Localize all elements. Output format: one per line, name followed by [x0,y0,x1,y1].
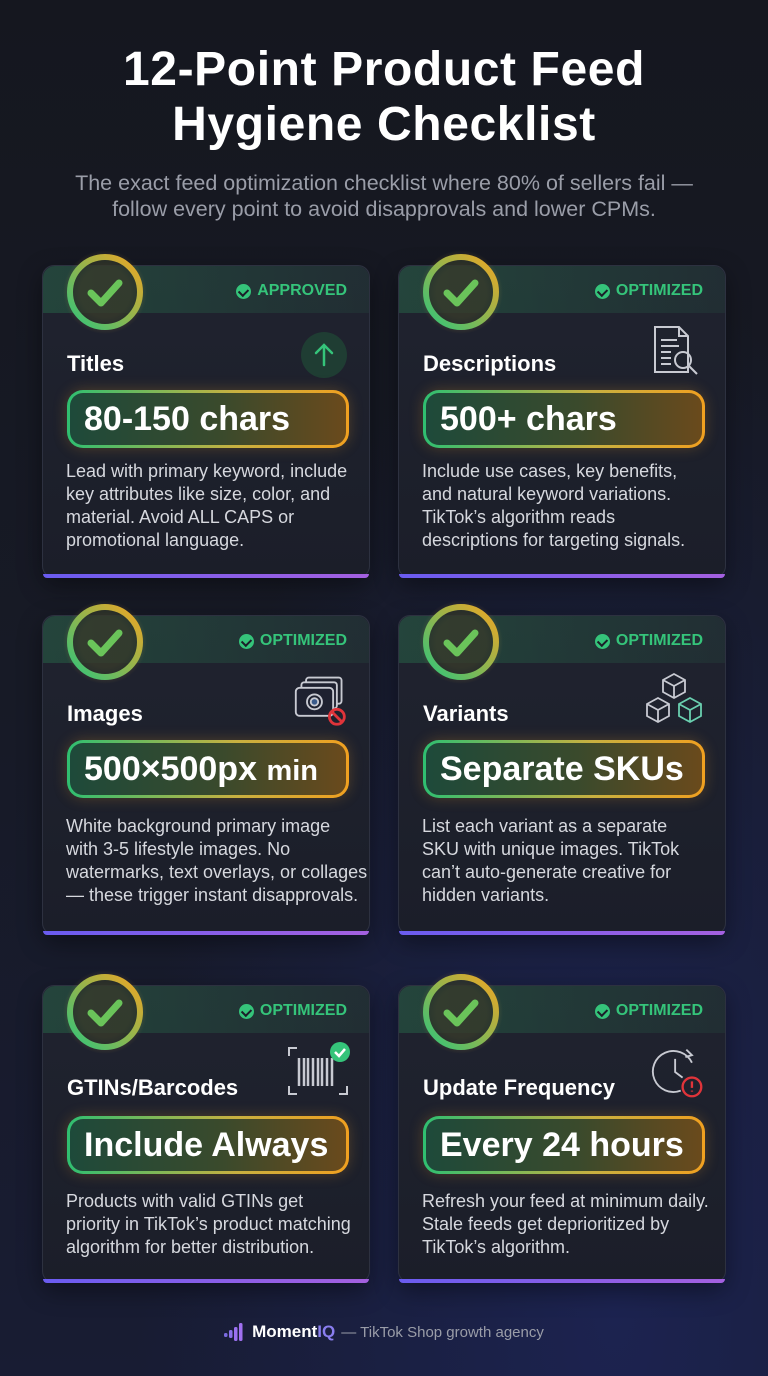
panel: descriptions: 500+ chars [440,400,617,438]
footer [224,1322,544,1341]
status: OPTIMIZED [616,632,703,649]
status: OPTIMIZED [616,282,703,299]
footer: — TikTok Shop growth agency [341,1324,544,1340]
icon: clock alert [652,1049,702,1098]
panel: variants [398,615,726,935]
panel: variants: SKU with unique images. TikTok can’t auto-generate creative for hidden variants. [422,839,679,905]
icon: check badge [65,602,145,682]
panel: descriptions: descriptions for targeting signals. [422,530,685,550]
panel: titles [42,265,370,578]
panel: images: White background primary image [66,816,330,836]
panel: gtins: GTINs/Barcodes [67,1075,238,1100]
panel: titles: Titles [67,351,124,376]
panel: gtins: Products with valid GTINs get [66,1191,303,1211]
icon: logo bars [224,1323,242,1341]
status: APPROVED [257,282,347,299]
subtitle [75,171,693,221]
subtitle: The exact feed optimization checklist where 80% of sellers fail — [75,171,693,195]
panel: descriptions: Descriptions [423,351,556,376]
panel: images: Images [67,701,143,726]
title [123,43,645,151]
icon: check badge [66,252,145,332]
panel: update frequency: Refresh your feed at minimum daily. Stale feeds get deprioritized by TikTok’s algorithm. [422,1191,709,1257]
status: OPTIMIZED [260,632,347,649]
icon: check badge [422,972,501,1052]
panel: update frequency [398,985,726,1283]
title: 12-Point Product Feed [123,43,645,96]
panel: gtins: Include Always [84,1126,328,1164]
panel: variants: Separate SKUs [440,750,684,788]
status: OPTIMIZED [260,1002,347,1019]
panel: images [42,615,370,935]
panel: update frequency: Every 24 hours [440,1126,684,1164]
panel: images: with 3-5 lifestyle images. No watermarks, text overlays, or collages — these trigger instant disapprovals. [66,839,367,905]
footer: MomentIQ [252,1322,335,1341]
status: OPTIMIZED [616,1002,703,1019]
title: Hygiene Checklist [172,98,596,151]
panel: variants: Variants [423,701,509,726]
panel: gtins: priority in TikTok’s product matching algorithm for better distribution. [66,1214,351,1257]
icon: cubes [646,673,702,723]
panel: variants: List each variant as a separate [422,816,667,836]
icon: arrow up [301,332,347,378]
panel: titles: Lead with primary keyword, include key attributes like size, color, and material. Avoid ALL CAPS or promotional language. [66,461,347,550]
icon: check badge [65,972,145,1052]
panel: gtins [42,985,370,1283]
panel: titles: 80-150 chars [84,400,290,438]
panel: update frequency: Update Frequency [423,1075,615,1100]
icon: check badge [422,602,501,682]
panel: descriptions: and natural keyword variations. [422,484,671,504]
panel: descriptions: Include use cases, key benefits, [422,461,677,481]
panel: descriptions [398,265,726,578]
icon: check badge [422,252,501,332]
panel: images: 500×500px min [84,750,318,788]
icon: barcode [288,1042,350,1095]
panel: descriptions: TikTok’s algorithm reads [422,507,615,527]
icon: photos with no sign [294,676,346,726]
icon: document search [654,326,698,375]
subtitle: follow every point to avoid disapprovals and lower CPMs. [112,197,656,221]
